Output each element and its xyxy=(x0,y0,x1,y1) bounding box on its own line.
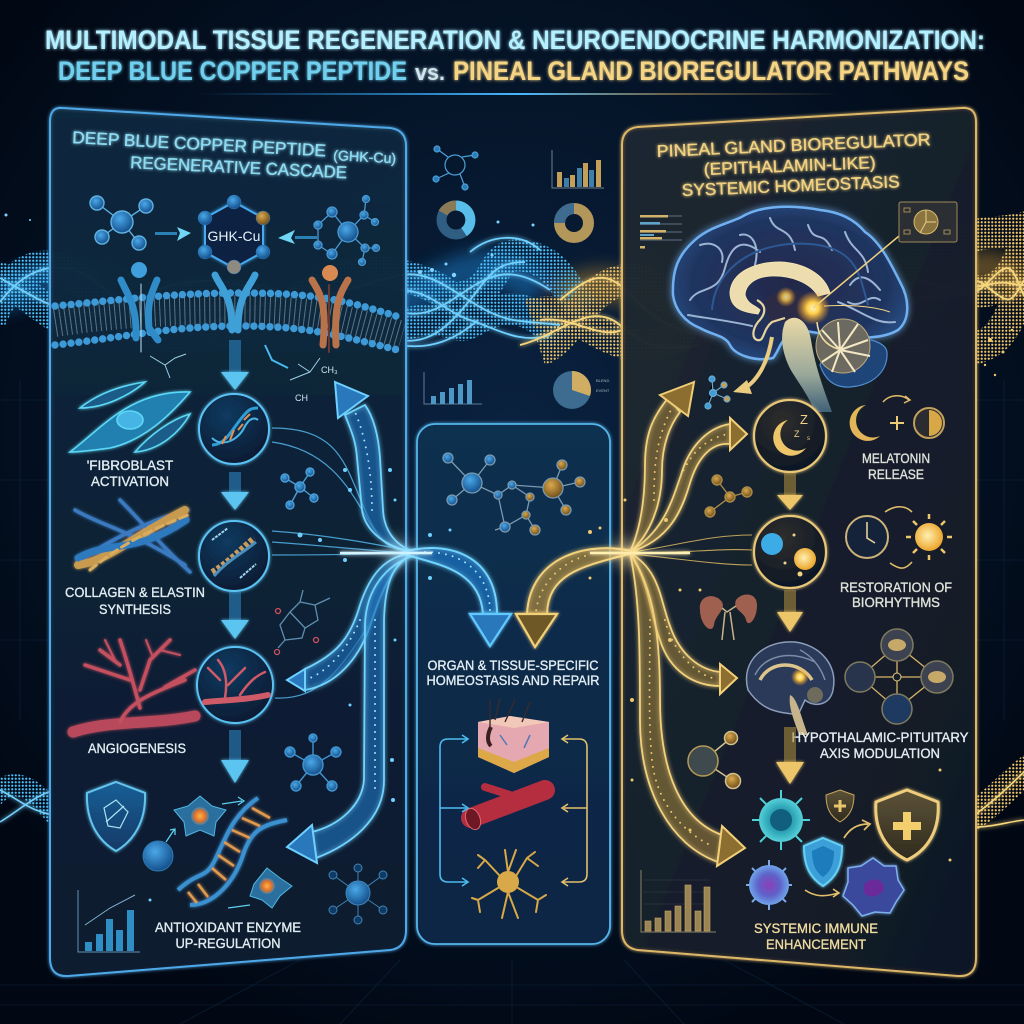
label hypothalamic: HYPOTHALAMIC-PITUITARY xyxy=(792,730,968,745)
right panel heading: SYSTEMIC HOMEOSTASIS xyxy=(681,172,900,200)
lower-left wave xyxy=(0,785,60,820)
icon: star molecule xyxy=(90,196,153,250)
label fibroblast: 'FIBROBLAST xyxy=(87,458,173,473)
label collagen xyxy=(65,585,205,617)
bar chart blue xyxy=(424,372,482,404)
biorhythm circle xyxy=(754,516,826,588)
moon circle: Z xyxy=(800,412,808,427)
label restoration xyxy=(840,580,952,610)
gold loop arrows xyxy=(562,735,587,886)
DNA helix xyxy=(178,798,287,905)
network icons xyxy=(845,629,953,724)
down arrow biorhythm xyxy=(777,590,803,632)
label antioxidant: ANTIOXIDANT ENZYME xyxy=(155,920,301,935)
bright gold strands xyxy=(520,268,1024,348)
icon: ring molecule right xyxy=(314,196,380,266)
pie chart: EVENT xyxy=(596,388,610,393)
title: vs. xyxy=(415,60,445,85)
brain illustration xyxy=(673,207,907,412)
divider under title xyxy=(200,93,840,95)
circle: collagen xyxy=(199,521,269,591)
right panel heading xyxy=(656,130,931,200)
molecule gold 1 xyxy=(705,475,752,517)
hex molecule xyxy=(329,864,387,924)
arrow into hexagon left xyxy=(155,227,191,241)
receptor blue centre xyxy=(215,275,255,330)
molecule top gold xyxy=(705,376,730,409)
bar chart left xyxy=(78,890,140,952)
moon circle: Z xyxy=(794,429,800,439)
label antioxidant: UP-REGULATION xyxy=(176,936,280,951)
label collagen: SYNTHESIS xyxy=(99,602,171,617)
label hypothalamic xyxy=(792,730,968,761)
label hypothalamic: AXIS MODULATION xyxy=(820,746,940,761)
label immune xyxy=(754,921,878,952)
down arrow 3 xyxy=(221,592,249,639)
thin gold flow lines xyxy=(632,535,752,565)
big blue arrows xyxy=(272,382,511,863)
label restoration: BIORHYTHMS xyxy=(852,595,940,610)
gold dot ribbons xyxy=(530,225,1024,350)
molecule 1 xyxy=(281,468,318,509)
down arrow 1 xyxy=(221,340,249,390)
circle: DNA xyxy=(199,394,269,464)
small brain xyxy=(746,642,834,735)
chemistry fragments xyxy=(150,345,338,403)
cerebellum xyxy=(816,319,870,373)
clock and sun icons xyxy=(846,507,952,568)
blue dot ribbons xyxy=(0,255,585,340)
shield icon xyxy=(87,782,145,851)
callout box xyxy=(899,202,957,242)
donut chart gold xyxy=(560,208,588,238)
macrophage xyxy=(843,858,904,916)
collagen fibres xyxy=(75,500,190,572)
chemistry fragments: CH xyxy=(295,393,308,403)
arrow to immune cells xyxy=(630,553,745,866)
receptor orange xyxy=(312,265,348,352)
label melatonin: RELEASE xyxy=(868,467,924,482)
molecule 2 chemical xyxy=(274,590,330,654)
arrow up right xyxy=(630,382,694,552)
label immune: ENHANCEMENT xyxy=(766,937,866,952)
label organ and tissue xyxy=(426,658,600,688)
donut chart blue xyxy=(442,205,470,234)
panel: organ and tissue homeostasis xyxy=(417,424,610,944)
arrow to centre panel xyxy=(516,548,636,647)
waves behind panels xyxy=(0,214,1024,827)
icon: floating molecule xyxy=(433,146,478,190)
wave glow xyxy=(0,268,1024,335)
moon circle xyxy=(754,400,826,472)
arrow to moon xyxy=(630,418,747,552)
circle: vessels xyxy=(197,647,273,723)
bright blue strands xyxy=(0,238,560,346)
antioxidant cell bottom xyxy=(228,868,292,908)
arrow into hexagon right xyxy=(278,230,317,244)
arrow to big shield xyxy=(844,820,870,838)
down arrow 4 xyxy=(221,730,249,783)
left panel heading: REGENERATIVE CASCADE xyxy=(130,153,347,182)
pie chart: BLEND xyxy=(596,378,609,383)
cerebellum lobe xyxy=(820,338,887,387)
immune cell teal xyxy=(752,790,810,850)
small shield gold xyxy=(826,790,854,822)
star particles xyxy=(4,214,534,277)
small arrow from brain xyxy=(733,337,772,394)
purple cell xyxy=(746,860,792,910)
fibroblast illustration xyxy=(70,382,190,452)
arrow to small brain xyxy=(630,553,737,694)
label immune: SYSTEMIC IMMUNE xyxy=(754,921,878,936)
mini bar list xyxy=(640,215,682,248)
thin flow lines xyxy=(272,428,415,698)
down arrow hypothalamic xyxy=(776,727,804,784)
vessel xyxy=(463,787,545,832)
label fibroblast xyxy=(87,458,173,489)
blue shield xyxy=(804,838,842,886)
arrow to centre panel xyxy=(400,548,511,646)
particles xyxy=(148,468,952,902)
bar chart gold xyxy=(641,870,716,932)
big shield gold xyxy=(876,790,938,860)
label angiogenesis: ANGIOGENESIS xyxy=(88,741,186,756)
arrow up xyxy=(335,382,415,552)
right panel heading: (EPITHALAMIN-LIKE) xyxy=(703,153,876,179)
neuron xyxy=(472,850,546,918)
panel: pineal gland bioregulator xyxy=(622,108,976,976)
lower-right wave xyxy=(955,765,1024,825)
kidney icon xyxy=(700,595,757,640)
arrow to antioxidant xyxy=(287,555,415,863)
blue loop arrows xyxy=(440,735,468,886)
bar chart gold xyxy=(552,150,604,188)
down arrow moon xyxy=(777,473,803,510)
big gold arrows xyxy=(516,382,752,866)
antioxidant sphere xyxy=(143,829,175,871)
pineal glow xyxy=(796,291,830,325)
centre panel molecules xyxy=(443,453,585,535)
title: DEEP BLUE COPPER PEPTIDE xyxy=(58,56,407,86)
right panel heading: PINEAL GLAND BIOREGULATOR xyxy=(656,130,931,161)
label organ and tissue: ORGAN & TISSUE-SPECIFIC xyxy=(428,658,599,673)
label fibroblast: ACTIVATION xyxy=(91,474,169,489)
label melatonin xyxy=(862,451,930,482)
receptor blue left xyxy=(121,262,158,352)
cell membrane xyxy=(55,293,402,351)
label collagen: COLLAGEN & ELASTIN xyxy=(65,585,205,600)
down arrow 2 xyxy=(221,472,249,510)
blood vessel illustration xyxy=(73,640,195,732)
arrow to circle three xyxy=(287,553,415,691)
molecule 3 xyxy=(285,734,341,791)
between-panels mini charts xyxy=(424,146,610,409)
label restoration: RESTORATION OF xyxy=(840,580,952,595)
left panel heading: DEEP BLUE COPPER PEPTIDE xyxy=(72,128,326,160)
panel: deep blue copper peptide xyxy=(50,108,406,976)
molecule gold 2 xyxy=(688,732,740,788)
arrow between immune cells xyxy=(805,889,839,897)
title: PINEAL GLAND BIOREGULATOR PATHWAYS xyxy=(453,56,969,86)
left panel heading xyxy=(72,128,397,182)
melatonin icons xyxy=(850,396,944,441)
label organ and tissue: HOMEOSTASIS AND REPAIR xyxy=(426,673,600,688)
label antioxidant xyxy=(155,920,301,951)
GHK-Cu hexagon: GHK-Cu xyxy=(208,228,260,244)
moon circle: s xyxy=(807,436,810,442)
skin block xyxy=(478,698,549,773)
chemistry fragments: CH₃ xyxy=(321,365,338,375)
GHK-Cu hexagon xyxy=(198,195,270,274)
antioxidant cell top xyxy=(174,796,244,836)
label melatonin: MELATONIN xyxy=(862,451,930,466)
pie chart xyxy=(553,371,610,409)
hub glows xyxy=(386,541,637,565)
title xyxy=(45,25,985,86)
left panel heading: (GHK-Cu) xyxy=(333,147,397,166)
